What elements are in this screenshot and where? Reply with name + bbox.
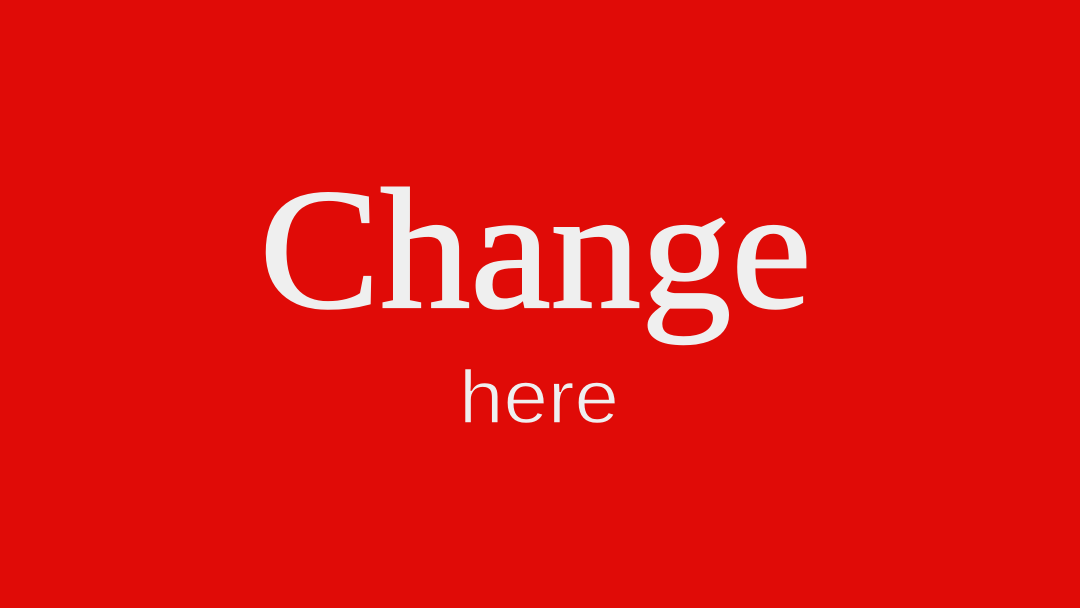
subtitle: here: here [459, 355, 619, 439]
title: Change: Change [260, 155, 812, 345]
